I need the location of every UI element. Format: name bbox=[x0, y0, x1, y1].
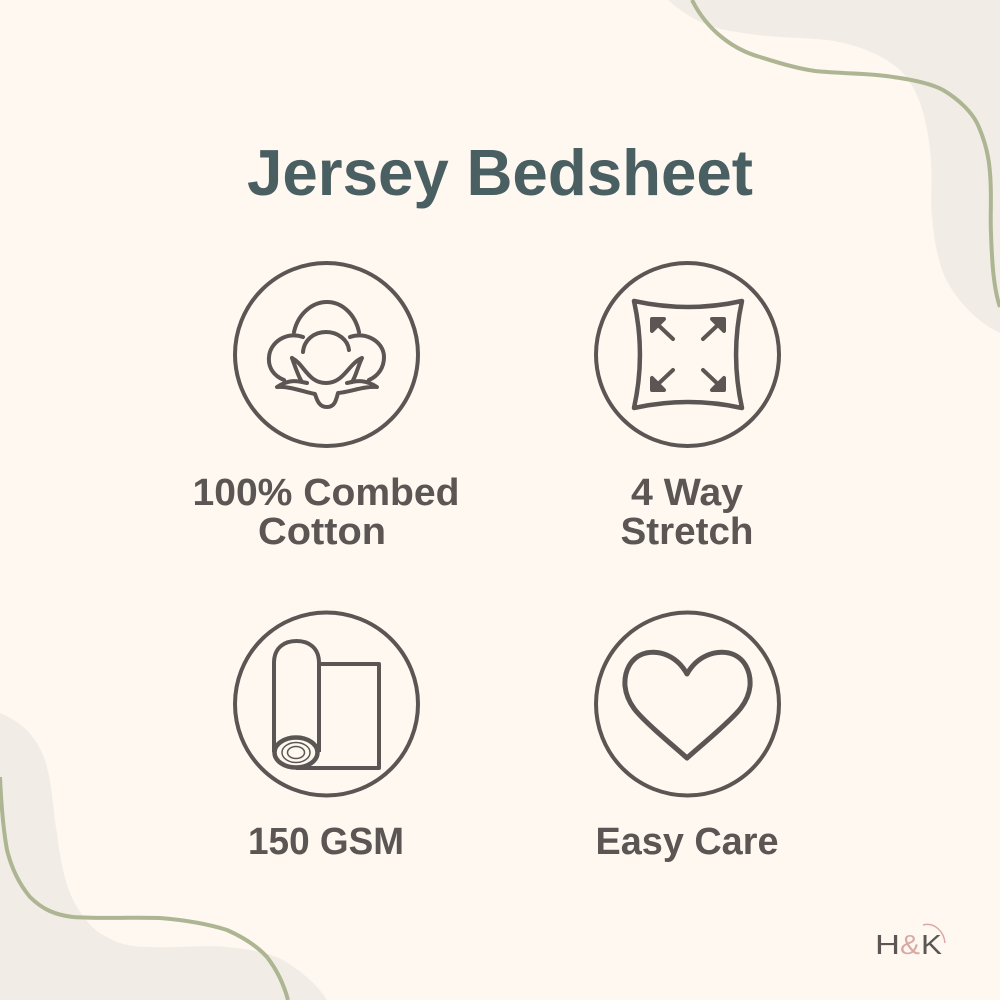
logo: H&K bbox=[875, 924, 945, 960]
feature: cotton bbox=[192, 263, 460, 553]
logo: H&K: H bbox=[875, 929, 900, 960]
icon: stretching square with arrows bbox=[596, 263, 779, 446]
label: 4 Way Stretch: Stretch bbox=[620, 511, 754, 553]
feature: easy care bbox=[596, 612, 779, 863]
title: Jersey Bedsheet bbox=[247, 136, 753, 209]
icon: fabric roll bbox=[235, 612, 418, 796]
logo: H&K: K bbox=[921, 929, 942, 960]
label: 100% Combed Cotton: Cotton bbox=[258, 511, 386, 553]
feature: GSM bbox=[235, 612, 418, 863]
label: 150 GSM: 150 GSM bbox=[248, 821, 404, 863]
label: 4 Way Stretch bbox=[620, 472, 754, 553]
decoration: top-right corner blob bbox=[668, 0, 1000, 333]
icon: cotton boll bbox=[235, 263, 418, 446]
decoration: bottom-left corner blob bbox=[0, 713, 327, 1000]
label: 4 Way Stretch: 4 Way bbox=[631, 472, 743, 514]
feature: stretch bbox=[596, 263, 779, 553]
logo: H&K: & bbox=[900, 929, 920, 960]
icon: heart bbox=[596, 612, 779, 796]
label: 100% Combed Cotton: 100% Combed bbox=[192, 472, 460, 514]
label: Easy Care: Easy Care bbox=[596, 821, 778, 863]
label: 100% Combed Cotton bbox=[192, 472, 460, 553]
